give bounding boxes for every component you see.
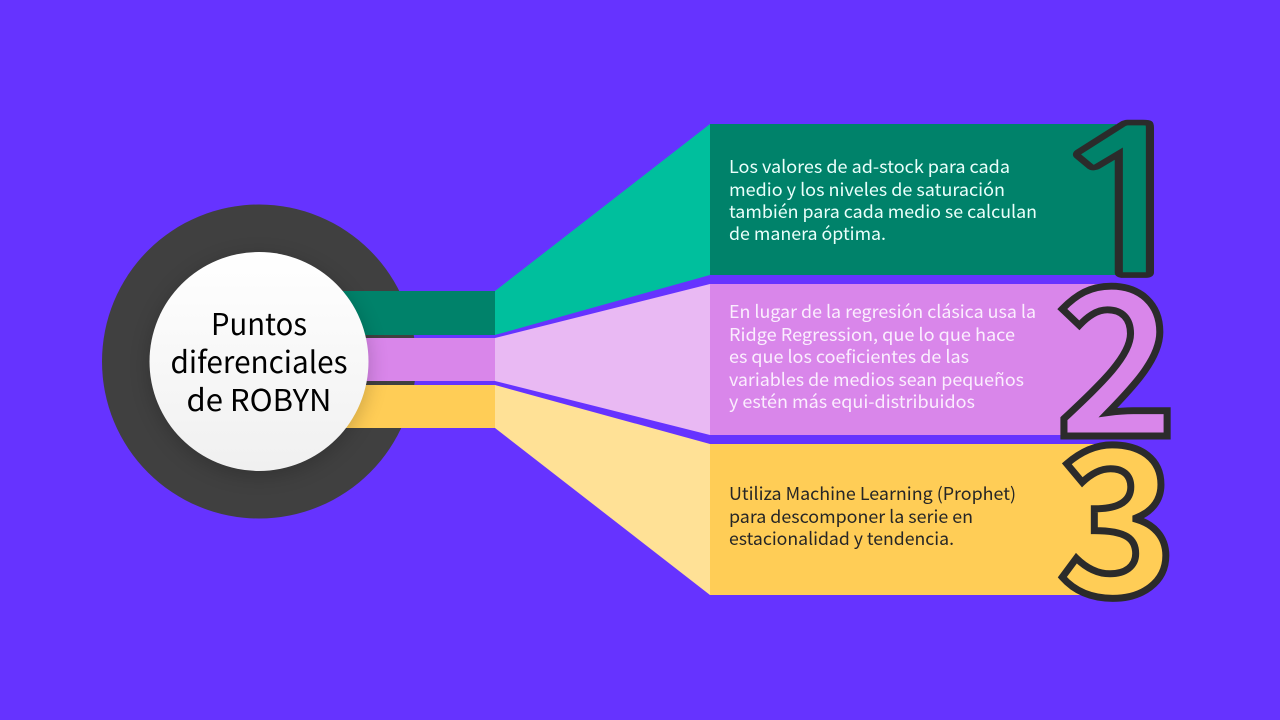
text: panel 1: medio y los niveles de saturación [729, 177, 1005, 202]
white circle [150, 252, 368, 471]
text: panel 2: variables de medios sean pequeños [729, 367, 1024, 392]
text: panel 2 [729, 299, 1036, 414]
text: panel 3: para descomponer la serie en [729, 504, 973, 529]
text: panel 1 [729, 154, 1037, 246]
text: panel 2: y estén más equi-distribuidos [729, 389, 975, 414]
bar: green [340, 291, 495, 335]
dark outer circle [102, 204, 416, 518]
bar: purple [340, 338, 495, 381]
panel: connector bars [340, 291, 495, 428]
panel 2 funnel [495, 284, 710, 435]
text: panel 2: es que los coeficientes de las [729, 344, 969, 369]
panel 2 box [710, 284, 1136, 435]
title [170, 300, 348, 420]
title: Puntos [211, 300, 307, 344]
text: panel 3 [729, 481, 1016, 551]
text: panel 2: Ridge Regression, que lo que hace [729, 322, 1015, 347]
numeral 3: 3 [1057, 358, 1177, 655]
panel 3 funnel [495, 385, 710, 595]
text: panel 3: estacionalidad y tendencia. [729, 526, 954, 551]
numeral 2: 2 [1055, 200, 1178, 495]
white circle shadow [149, 256, 369, 476]
panel 1 box [710, 124, 1116, 275]
text: panel 1: de manera óptima. [729, 221, 886, 246]
numeral 1: 1 [1040, 107, 1216, 305]
bar: yellow [340, 385, 495, 428]
text: panel 3: Utiliza Machine Learning (Prophet) [729, 481, 1016, 506]
panel 1 funnel [495, 124, 710, 335]
panel 3 box [710, 444, 1140, 595]
text: panel 2: En lugar de la regresión clásica usa la [729, 299, 1036, 324]
title: diferenciales [170, 338, 348, 382]
text: panel 1: Los valores de ad-stock para cada [729, 154, 1010, 179]
title: de ROBYN [186, 376, 332, 420]
text: panel 1: también para cada medio se calculan [729, 199, 1037, 224]
